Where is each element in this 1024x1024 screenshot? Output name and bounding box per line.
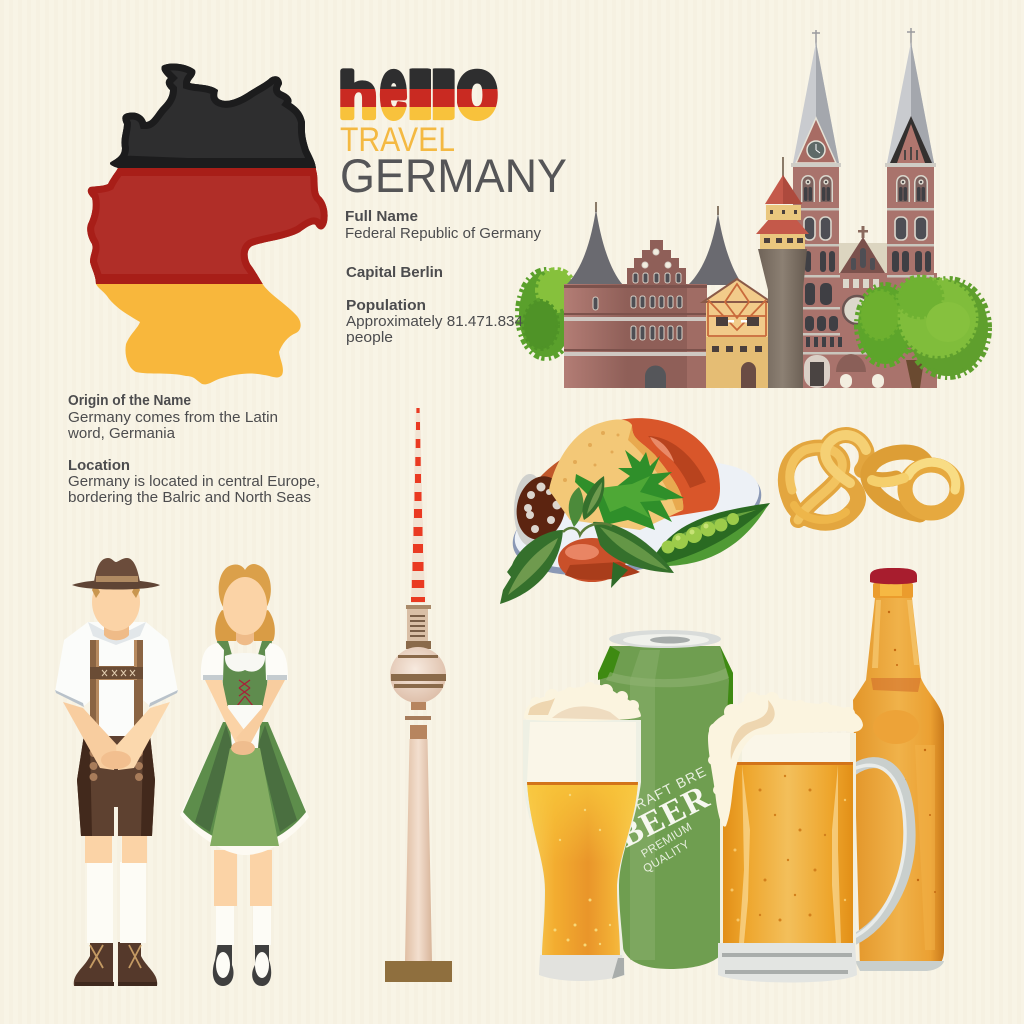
bubbles [888, 611, 936, 893]
arms [63, 702, 170, 770]
apron [210, 748, 279, 846]
bodice [217, 641, 272, 706]
lower storey [706, 337, 768, 388]
facts block: full name, capital, population [345, 209, 542, 346]
suspenders [90, 640, 143, 728]
right cone roof [717, 206, 719, 215]
illustration: beer mug [708, 692, 910, 982]
left crown [858, 286, 912, 364]
neck [236, 625, 254, 645]
arms [205, 680, 285, 755]
title: germany: GERMANY [340, 150, 567, 203]
title: travel: TRAVEL [340, 121, 455, 159]
foam shadow [731, 700, 775, 760]
highlight [915, 745, 935, 950]
bubbles [554, 794, 611, 946]
pigtails [215, 610, 275, 641]
sleeves [201, 643, 288, 680]
illustration: left tree [519, 270, 574, 357]
plate shadow [514, 474, 546, 546]
origin text: Germany comes from the Latin [68, 410, 278, 426]
roast meat [620, 418, 720, 520]
right spire [885, 28, 936, 167]
left pretzel [786, 435, 867, 523]
upper shaft [407, 609, 428, 641]
right leaf [593, 522, 674, 573]
band [760, 233, 805, 249]
bubbles [758, 775, 826, 922]
shoes [213, 942, 271, 986]
foam body [742, 733, 850, 762]
chemise [225, 653, 265, 672]
can label: quality: QUALITY [641, 838, 692, 876]
full name label: Full Name [345, 209, 418, 225]
illustration: woman in dirndl [180, 564, 309, 986]
bottle body [853, 598, 944, 970]
glass base [539, 955, 625, 981]
boots [74, 942, 157, 986]
sphere bands [391, 655, 446, 688]
plate [502, 442, 772, 596]
legs [214, 850, 272, 906]
cathedral body [803, 273, 937, 388]
foam head [524, 682, 641, 721]
top red roof [765, 175, 802, 204]
lower windows [805, 251, 931, 347]
illustration: man in lederhosen [55, 558, 178, 986]
mug base [718, 943, 857, 982]
stepped gable [627, 240, 686, 290]
illustration: Berlin TV tower [385, 408, 452, 982]
origin text line 2: word, Germania [67, 426, 176, 442]
door [741, 362, 756, 388]
meat highlight [648, 436, 706, 488]
shirt [55, 622, 178, 736]
right crown [908, 280, 988, 376]
map: Germany in flag colours [87, 64, 328, 384]
sleeve shadows [55, 690, 178, 707]
population label: Population [346, 298, 426, 314]
upper collar [406, 605, 431, 609]
illustration: right tree [858, 277, 988, 388]
location text: Germany is located in central Europe, [68, 474, 320, 490]
spire finial [782, 157, 784, 178]
beer [527, 782, 638, 957]
illustration: round tower [756, 157, 809, 388]
bread [549, 419, 683, 530]
face [223, 577, 267, 635]
hair [219, 564, 271, 610]
capital: Capital Berlin [346, 265, 443, 281]
crumbs [563, 431, 620, 482]
mug body [720, 733, 856, 945]
beer [723, 762, 853, 943]
right tower [887, 165, 934, 275]
left tower wall [564, 284, 627, 388]
beer shine [736, 762, 853, 943]
centre wall [627, 284, 687, 388]
location label: Location [68, 458, 130, 474]
can highlight [630, 650, 660, 960]
gable [703, 279, 771, 302]
hat [72, 558, 160, 590]
shoulder band [871, 678, 921, 692]
socks [87, 862, 146, 943]
illustration: half-timbered house [703, 279, 771, 388]
left cone roof [595, 202, 597, 212]
knees [85, 836, 147, 863]
population value: Approximately 81.471.834 [346, 314, 523, 330]
left leaf [500, 530, 563, 604]
middle windows [804, 217, 927, 240]
shoulder band [606, 668, 729, 687]
left tower [793, 165, 839, 275]
collar [88, 622, 146, 645]
upper windows [770, 210, 797, 214]
sausage edge [520, 460, 570, 530]
windows [410, 615, 425, 637]
cap [870, 568, 917, 584]
gable windows [633, 249, 681, 283]
can dark edges [598, 646, 733, 735]
can lid [609, 630, 721, 648]
socks [216, 905, 271, 945]
upper storey [766, 205, 801, 220]
pea pod [650, 503, 770, 566]
bottle neck ring [873, 583, 913, 598]
bottle panel [873, 710, 919, 744]
can label: craft brew: RAFT BRE [632, 763, 709, 813]
title: hello [340, 68, 498, 121]
central gable [840, 226, 885, 288]
glass outline [523, 720, 641, 981]
can body [600, 646, 733, 969]
location text line 2: bordering the Balric and North Seas [68, 490, 311, 506]
shorts [77, 735, 155, 836]
rose window [843, 296, 871, 324]
wall windows [593, 296, 682, 340]
tower twin windows [801, 175, 928, 202]
skirt shading [195, 725, 297, 832]
upper windows [716, 317, 759, 326]
foam shading [528, 698, 620, 720]
lacing [237, 680, 253, 706]
gate door [645, 366, 666, 388]
base [385, 961, 452, 982]
apron top [228, 705, 262, 748]
full name value: Federal Republic of Germany [345, 226, 542, 242]
neck shine [872, 600, 919, 668]
foam top and drip [708, 692, 863, 827]
shaft [758, 249, 807, 388]
leaf stems [563, 523, 612, 535]
sliced sausage [511, 472, 571, 544]
band windows [764, 238, 803, 243]
trunk [906, 360, 924, 388]
herbs [575, 450, 684, 530]
tomato [558, 538, 626, 582]
bread shading [628, 425, 683, 510]
upper storey [706, 300, 768, 337]
striped wall [839, 243, 888, 273]
handle [853, 763, 910, 940]
can label: premium: PREMIUM [639, 821, 694, 861]
tan section [410, 725, 427, 739]
beer highlights [527, 782, 638, 846]
square windows [712, 346, 762, 352]
upright leaves [569, 476, 604, 527]
right pretzel [868, 452, 957, 515]
illustration: food plate [500, 418, 772, 604]
illustration: beer glass [520, 682, 641, 981]
origin label: Origin of the Name [68, 393, 191, 409]
sphere [390, 647, 446, 703]
antenna [411, 408, 425, 603]
sphere neck [411, 702, 426, 710]
portal [804, 354, 884, 388]
foam body [527, 722, 636, 782]
illustration: beer bottle [853, 568, 944, 971]
info block: origin and location [67, 393, 320, 506]
skirt [183, 722, 306, 846]
timber beams [708, 284, 766, 336]
illustration: green beer can [598, 630, 733, 969]
bottom [855, 961, 944, 971]
left spire [791, 30, 841, 167]
illustration: Holstentor gate [564, 202, 743, 388]
skirt hem [180, 725, 309, 855]
lower shaft [405, 739, 432, 961]
small leaf [611, 562, 628, 588]
illustration: cathedral [791, 28, 937, 388]
light bands [564, 317, 707, 356]
can label: beer: BEER [613, 778, 716, 855]
right wall [687, 284, 707, 388]
illustration: pretzels [786, 435, 957, 523]
lower collar [405, 716, 431, 720]
tower cornices [793, 208, 934, 354]
lower red roof [756, 219, 809, 234]
head [92, 573, 140, 640]
ring [406, 641, 431, 649]
population unit: people [346, 330, 393, 346]
